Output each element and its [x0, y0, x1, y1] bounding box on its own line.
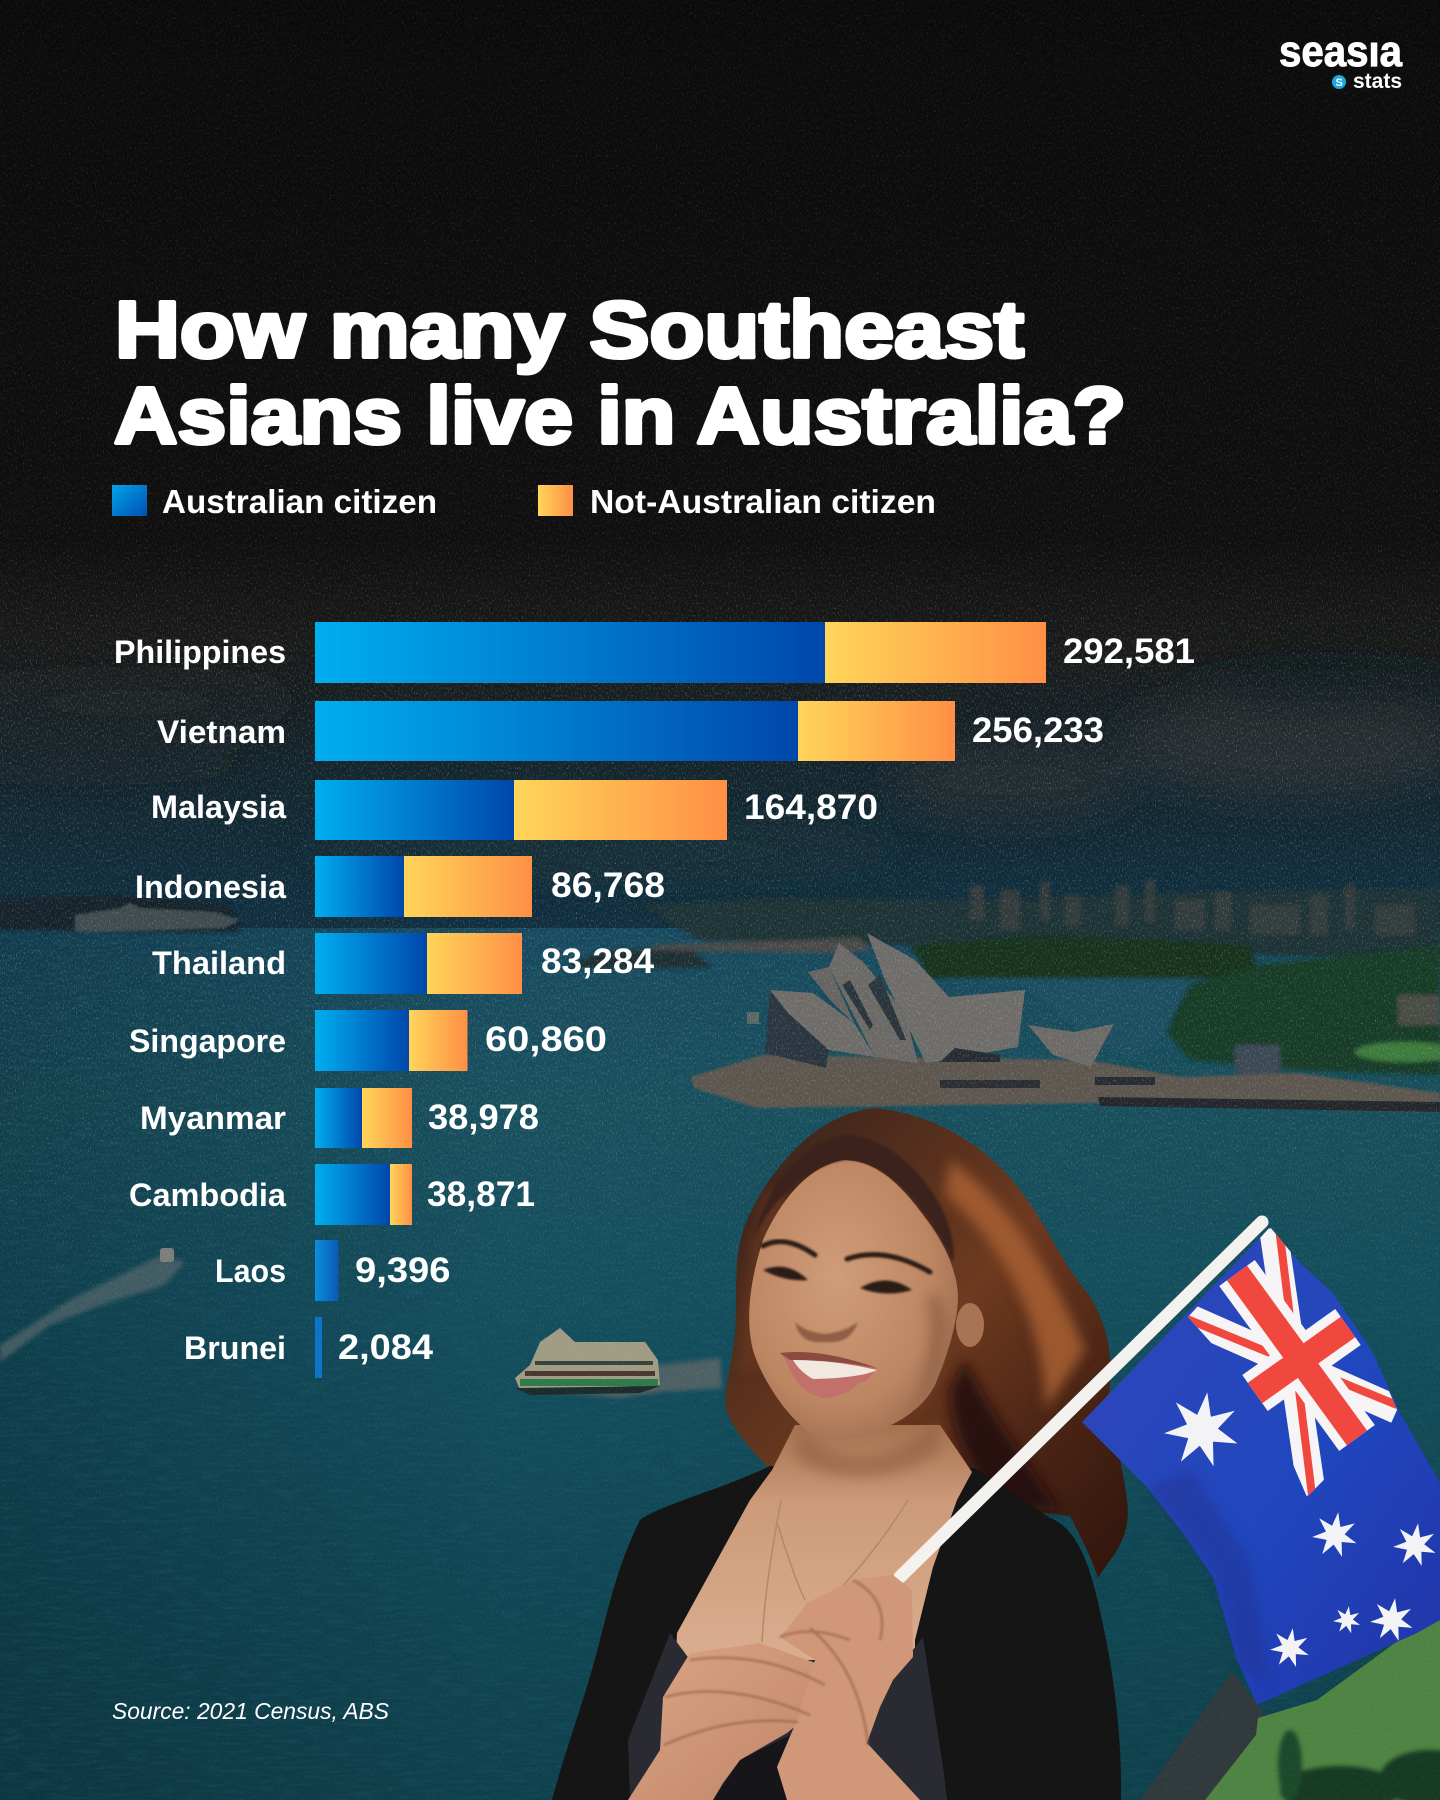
row: Brunei: Brunei: [184, 1330, 286, 1366]
row: Indonesia: [135, 856, 665, 917]
dark gap between wrists: [713, 1735, 790, 1800]
row: Malaysia: [151, 780, 878, 840]
nose shading: [795, 1322, 858, 1342]
cheek shadow: [905, 1290, 946, 1420]
row: Thailand: Thailand: [152, 945, 286, 981]
row: Indonesia: 86,768: [551, 866, 665, 905]
row: Laos: [215, 1240, 450, 1301]
row: Laos: Laos: [215, 1253, 286, 1289]
logo: seasia stats: S: [1336, 77, 1343, 89]
row: Philippines: Philippines: [114, 634, 286, 670]
flag pole: [900, 1222, 1262, 1577]
row: Cambodia: [129, 1164, 535, 1225]
flag: [1082, 1227, 1440, 1705]
neck shadow: [795, 1420, 940, 1477]
row: Cambodia: Cambodia: [129, 1177, 286, 1213]
cruise ship on far shore: [75, 903, 240, 932]
park trees: [1278, 1730, 1440, 1800]
source note: Source: 2021 Census, ABS: [112, 1698, 390, 1724]
row: Vietnam: Vietnam: [157, 714, 286, 750]
legend: Not-Australian citizen: Not-Australian citizen: [590, 483, 936, 520]
row: Laos: 9,396: [355, 1251, 450, 1290]
clasped hands: [628, 1575, 920, 1800]
far shoreline and city skyline: [0, 880, 1440, 968]
tree lined shore behind opera house: [910, 935, 1440, 1100]
row: Brunei: 2,084: [338, 1328, 434, 1367]
row: Myanmar: [140, 1088, 539, 1148]
cardigan: [552, 1466, 1121, 1800]
title: How many Southeast: [115, 285, 1024, 374]
row: Philippines: [114, 622, 1195, 683]
eyes: [763, 1267, 912, 1294]
neck and chest: [675, 1425, 972, 1680]
title: Asians live in Australia?: [114, 371, 1126, 460]
row: Cambodia: 38,871: [427, 1175, 535, 1214]
park lawn: [1205, 1610, 1440, 1800]
legend: Australian citizen: Australian citizen: [162, 483, 437, 520]
row: Myanmar: Myanmar: [140, 1100, 286, 1136]
smile: [780, 1352, 877, 1398]
southern cross stars: [1268, 1509, 1439, 1669]
necklace: [762, 1500, 908, 1642]
row: Philippines: 292,581: [1063, 632, 1195, 671]
logo: seasia stats: [1280, 42, 1403, 89]
stacked bar chart: Southeast Asians in Australia by country: [114, 622, 1195, 1378]
commonwealth star: [1161, 1387, 1244, 1469]
small boat near opera house: [747, 1012, 759, 1024]
row: Indonesia: Indonesia: [135, 869, 286, 905]
row: Thailand: 83,284: [541, 942, 655, 981]
row: Singapore: Singapore: [129, 1023, 286, 1059]
hairline shading: [755, 1135, 954, 1262]
eyebrows: [763, 1242, 930, 1272]
row: Singapore: 60,860: [485, 1020, 607, 1059]
speedboat with wake: [0, 1248, 185, 1362]
clouds: [0, 672, 1440, 872]
row: Singapore: [129, 1010, 607, 1071]
legend: [112, 483, 936, 520]
ear: [956, 1303, 984, 1347]
face: [749, 1160, 958, 1439]
photo: smiling woman holding Australian flag: [552, 1108, 1440, 1800]
Sydney Opera House: [691, 933, 1440, 1112]
row: Vietnam: [157, 701, 1104, 761]
row: Vietnam: 256,233: [972, 711, 1104, 750]
harbour water: [0, 928, 1440, 1800]
left hand: [628, 1643, 827, 1800]
row: Myanmar: 38,978: [428, 1098, 539, 1137]
hair, back layer: [725, 1108, 1128, 1578]
right hand: [777, 1575, 920, 1800]
dark inner top: [628, 1633, 947, 1800]
row: Malaysia: Malaysia: [151, 789, 286, 825]
hair highlights: [742, 1160, 1085, 1510]
title: [114, 285, 1126, 460]
row: Thailand: [152, 933, 655, 994]
row: Brunei: [184, 1317, 434, 1378]
logo: seasia stats: seasia: [1279, 28, 1403, 76]
logo: seasia stats: stats: [1353, 70, 1402, 93]
shoreline walkway: [1140, 1672, 1262, 1800]
union jack: [1187, 1228, 1397, 1495]
ferry: [515, 1328, 722, 1398]
finger creases: [664, 1580, 882, 1745]
row: Malaysia: 164,870: [744, 788, 878, 827]
